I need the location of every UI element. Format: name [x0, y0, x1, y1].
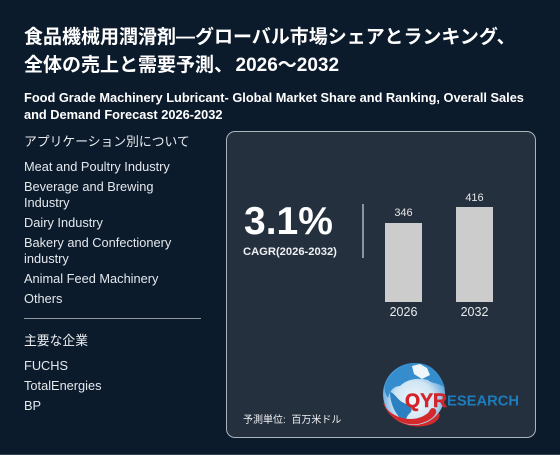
bar chart: [385, 192, 493, 319]
CAGR value: 3.1%: [244, 200, 333, 243]
application list: Others: [24, 291, 62, 306]
company list: BP: [24, 398, 41, 413]
title: 食品機械用潤滑剤—グローバル市場シェアとランキング、: [24, 27, 516, 48]
logo wordmark: QYR: [405, 390, 447, 412]
application list: Bakery and Confectionery: [24, 235, 171, 250]
value 2026: 346: [394, 207, 413, 219]
application list: industry: [24, 251, 69, 266]
application list: Animal Feed Machinery: [24, 271, 158, 286]
unit note: 予測単位: 百万米ドル: [243, 415, 341, 426]
company list: [24, 358, 102, 413]
year 2026: 2026: [390, 305, 417, 319]
title: 全体の売上と需要予測、2026～2032: [24, 55, 339, 76]
application list: [24, 159, 172, 306]
panel: forecast: [226, 131, 536, 438]
logo: QYR Research: ESEARCH: [447, 394, 519, 410]
application list: Beverage and Brewing: [24, 179, 153, 194]
subtitle: Food Grade Machinery Lubricant- Global Market Share and Ranking, Overall Sales: [24, 90, 524, 105]
subtitle: and Demand Forecast 2026-2032: [24, 107, 222, 122]
icon: globe: [383, 363, 445, 427]
heading: key companies: 主要な企業: [24, 333, 88, 348]
company list: TotalEnergies: [24, 378, 102, 393]
application list: Meat and Poultry Industry: [24, 159, 170, 174]
subtitle: [24, 90, 524, 122]
logo: QYR Research: [383, 363, 519, 426]
bar 2026: [385, 223, 422, 302]
year 2032: 2032: [461, 305, 488, 319]
company list: FUCHS: [24, 358, 68, 373]
value 2032: 416: [465, 192, 484, 204]
title: [24, 26, 516, 76]
bar 2032: [456, 207, 493, 302]
application list: Industry: [24, 195, 70, 210]
CAGR label: CAGR(2026-2032): [243, 246, 337, 258]
application list: Dairy Industry: [24, 215, 103, 230]
heading: applications: アプリケーション別について: [24, 134, 190, 149]
